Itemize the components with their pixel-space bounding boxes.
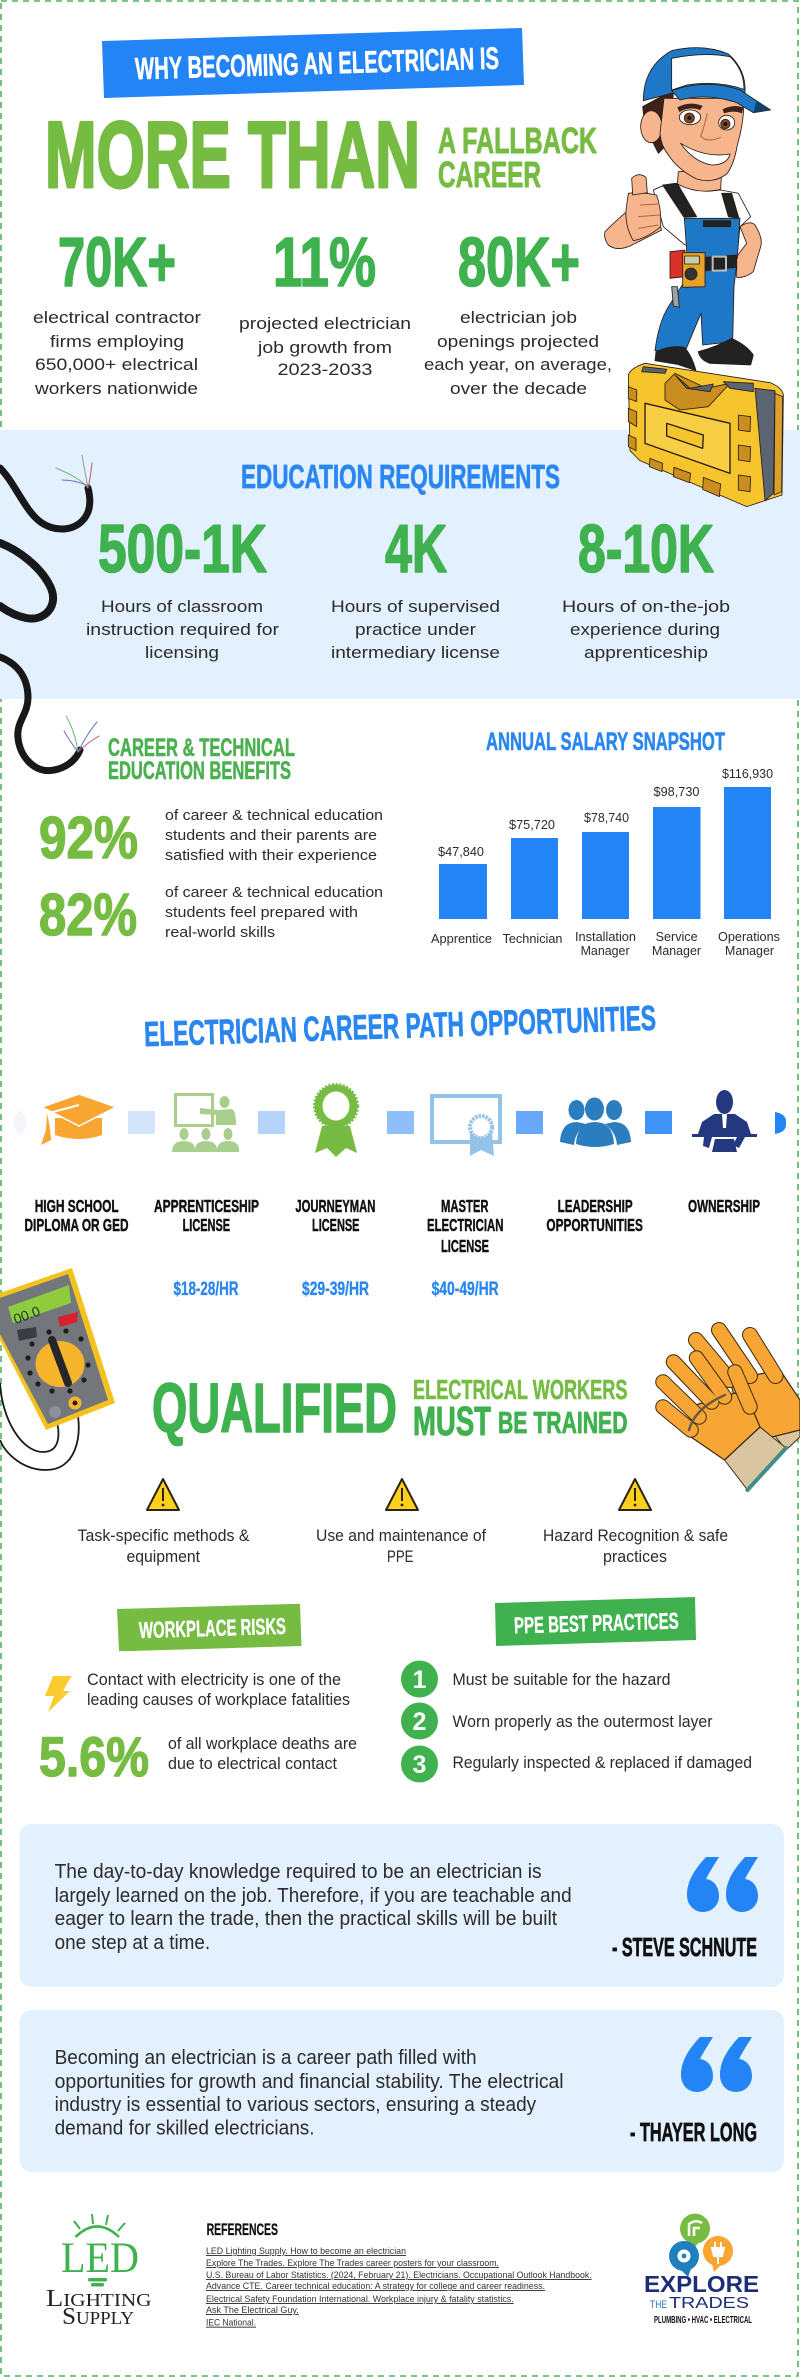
stat: 80K+ job openings: electrician job [460, 308, 577, 327]
illustration: electrician mascot standing on toolbox [605, 48, 783, 507]
risk text: contact with electricity [87, 1670, 350, 1709]
stat: 5.6% of workplace deaths: of all workplace deaths are [168, 1734, 357, 1753]
stat: 4K supervised practice hours: Hours of supervised [331, 597, 500, 616]
stat: 8-10K on-the-job hours [562, 511, 730, 662]
stat: 70K+ contractor firms: electrical contractor [33, 308, 201, 327]
stat: 11% job growth [239, 223, 411, 379]
title: a fallback career [438, 120, 597, 195]
training item: hazard recognition: Hazard Recognition & safe [543, 1526, 728, 1545]
stat: 92% satisfied: satisfied with their experience [165, 847, 377, 864]
stat: 80K+ job openings: 80K+ [458, 223, 580, 301]
references: U.S. Bureau of Labor Statistics. (2024, February 21). Electricians. Occupational Outlook Handbook. [206, 2270, 592, 2281]
path step: master electrician license: LICENSE [441, 1236, 489, 1256]
list item 2: worn properly: 2 [413, 1708, 426, 1736]
training item: task-specific methods: Task-specific methods & [78, 1526, 250, 1545]
heading: career and technical education benefits: EDUCATION BENEFITS [108, 757, 291, 785]
bar chart: annual salary: Manager [652, 943, 702, 958]
stat: 11% job growth: job growth from [257, 338, 392, 357]
list item 1: suitable for the hazard [401, 1660, 670, 1698]
list item 1: suitable for the hazard: Must be suitable for the hazard [452, 1670, 670, 1689]
training item: use and maintenance of PPE: PPE [387, 1547, 414, 1566]
tag: workplace risks [117, 1604, 302, 1651]
path step: journeyman license: $29-39/HR [302, 1279, 369, 1300]
path step: journeyman license [295, 1196, 375, 1300]
training item: task-specific methods: equipment [126, 1547, 200, 1566]
bar chart: annual salary: $47,840 [438, 844, 484, 859]
references: Explore The Trades. Explore The Trades career posters for your classroom. [206, 2258, 499, 2269]
path step: master electrician license: MASTER [441, 1196, 489, 1216]
logo: LED Lighting Supply: LED [61, 2235, 139, 2282]
panel: quote from Thayer Long [20, 2010, 784, 2172]
panel: education requirements background [0, 430, 800, 699]
panel: quote from Steve Schnute [20, 1824, 784, 1987]
stat: 82% prepared: 82% [39, 882, 137, 948]
logo: LED Lighting Supply: LIGHTING [46, 2286, 152, 2312]
logo: LED Lighting Supply: SUPPLY [62, 2304, 134, 2330]
stat: 500-1K classroom hours [86, 511, 279, 662]
stat: 8-10K on-the-job hours: 8-10K [578, 511, 714, 587]
stat: 5.6% of workplace deaths: due to electrical contact [168, 1754, 337, 1773]
logo: Explore The Trades: TRADES [669, 2295, 749, 2312]
path step: master electrician license [427, 1196, 504, 1300]
references: REFERENCES [207, 2221, 278, 2239]
stat: 92% satisfied: of career & technical education [165, 807, 383, 824]
stat: 500-1K classroom hours: instruction required for [86, 620, 279, 639]
stat: 5.6% of workplace deaths [39, 1725, 357, 1788]
icon: electrical cables [0, 455, 99, 771]
panel: quote from Thayer Long: Becoming an electrician is a career path filled with [55, 2047, 477, 2069]
title banner: why becoming an electrician is: WHY BECOMING AN ELECTRICIAN IS [135, 41, 499, 86]
panel: quote from Steve Schnute: one step at a time. [55, 1932, 210, 1954]
stat: 82% prepared: students feel prepared with [165, 904, 358, 921]
stat: 4K supervised practice hours: practice under [355, 620, 476, 639]
icon: apprenticeship classroom [172, 1094, 239, 1152]
path step: ownership: OWNERSHIP [688, 1196, 760, 1216]
bar chart: annual salary: $78,740 [584, 810, 629, 825]
heading: electrical workers must be trained: ELECTRICAL WORKERS [413, 1374, 628, 1405]
icon: owner at desk [692, 1090, 757, 1152]
path step: journeyman license: JOURNEYMAN [295, 1196, 375, 1216]
path step: high school diploma or GED: DIPLOMA OR GED [24, 1215, 128, 1235]
stat: 82% prepared [39, 882, 383, 948]
tag: workplace risks: WORKPLACE RISKS [139, 1613, 286, 1643]
references: LED Lighting Supply. How to become an electrician [206, 2246, 406, 2257]
path step: journeyman license: LICENSE [312, 1215, 360, 1235]
risk text: contact with electricity: Contact with electricity is one of the [87, 1670, 341, 1689]
stat: 500-1K classroom hours: licensing [145, 643, 219, 662]
logo: Explore The Trades [644, 2214, 759, 2326]
stat: 70K+ contractor firms: firms employing [50, 332, 184, 351]
icon: legs and boots [655, 260, 753, 371]
path step: leadership opportunities: OPPORTUNITIES [546, 1215, 643, 1235]
path step: apprenticeship license: $18-28/HR [174, 1279, 239, 1300]
path step: apprenticeship license: LICENSE [183, 1215, 230, 1235]
references: IEC National. [206, 2318, 256, 2329]
list item 3: regularly inspected: Regularly inspected & replaced if damaged [452, 1753, 752, 1772]
icon: leadership group [560, 1098, 631, 1147]
stat: 70K+ contractor firms [33, 223, 201, 398]
panel: quote from Steve Schnute: The day-to-day knowledge required to be an electrician is [55, 1861, 542, 1883]
stat: 11% job growth: projected electrician [239, 314, 411, 333]
tag: PPE best practices: PPE BEST PRACTICES [514, 1608, 679, 1638]
bar chart: annual salary: Installation [575, 929, 636, 944]
training item: hazard recognition: practices [603, 1547, 667, 1566]
training item: task-specific methods [78, 1479, 250, 1566]
list item 3: regularly inspected [401, 1746, 752, 1782]
references [206, 2221, 592, 2329]
stat: 80K+ job openings [424, 223, 612, 398]
list item 3: regularly inspected: 3 [413, 1751, 426, 1779]
list item 2: worn properly [401, 1702, 713, 1740]
stat: 92% satisfied: students and their parents are [165, 827, 377, 844]
icon: lightning bolt [45, 1676, 72, 1712]
stat: 80K+ job openings: over the decade [450, 379, 587, 398]
panel: quote from Steve Schnute: eager to learn the trade, then the practical skills will be built [55, 1908, 558, 1930]
stat: 11% job growth: 2023-2033 [278, 360, 372, 379]
stat: 500-1K classroom hours: Hours of classroom [101, 597, 263, 616]
panel: quote from Thayer Long: industry is essential to various sectors, ensuring a steady [55, 2094, 536, 2116]
title: more than: MORE THAN [45, 102, 420, 207]
path step: leadership opportunities: LEADERSHIP [558, 1196, 633, 1216]
icon: work gloves [663, 1330, 800, 1490]
list item 2: worn properly: Worn properly as the outermost layer [452, 1712, 713, 1731]
icon: tool belt [670, 250, 705, 307]
icon: torso and arms [605, 175, 761, 277]
title banner: why becoming an electrician is [102, 28, 524, 98]
icon: master certificate [432, 1096, 500, 1156]
references: Advance CTE. Career technical education: A strategy for college and career readiness. [206, 2281, 545, 2292]
panel: quote from Steve Schnute: largely learned on the job. Therefore, if you are teachable and [55, 1885, 572, 1907]
references: Electrical Safety Foundation International. Workplace injury & fatality statistics. [206, 2294, 514, 2305]
bar chart: annual salary: $75,720 [509, 817, 555, 832]
heading: electrical workers must be trained: MUST [413, 1398, 491, 1444]
heading: electrical workers must be trained [413, 1374, 628, 1444]
heading: career and technical education benefits: CAREER & TECHNICAL [108, 734, 295, 762]
heading: education requirements: EDUCATION REQUIREMENTS [241, 458, 560, 495]
stat: 4K supervised practice hours [331, 511, 500, 662]
stat: 5.6% of workplace deaths: 5.6% [39, 1725, 149, 1788]
tag: PPE best practices [495, 1597, 696, 1646]
path step: apprenticeship license: APPRENTICESHIP [154, 1196, 259, 1216]
title: a fallback career: A FALLBACK [438, 120, 597, 161]
stat: 8-10K on-the-job hours: apprenticeship [584, 643, 708, 662]
stat: 500-1K classroom hours: 500-1K [98, 511, 267, 587]
bar chart: annual salary: $116,930 [722, 766, 773, 781]
heading: electrical workers must be trained: BE TRAINED [498, 1405, 628, 1440]
icon: multimeter [0, 1268, 115, 1470]
bar chart: annual salary [431, 766, 780, 958]
bar chart: annual salary: Technician [502, 931, 562, 946]
logo: Explore The Trades: THE [650, 2299, 667, 2311]
stat: 8-10K on-the-job hours: Hours of on-the-job [562, 597, 730, 616]
icon: graduation cap [41, 1094, 116, 1145]
logo: LED Lighting Supply [46, 2214, 152, 2330]
heading: career and technical education benefits [108, 734, 295, 785]
path step: master electrician license: ELECTRICIAN [427, 1215, 504, 1235]
stat: 4K supervised practice hours: 4K [385, 511, 447, 587]
bar chart: annual salary: Apprentice [431, 931, 492, 946]
risk text: contact with electricity: leading causes of workplace fatalities [87, 1690, 350, 1709]
training item: use and maintenance of PPE [316, 1479, 486, 1566]
stat: 70K+ contractor firms: workers nationwide [34, 379, 198, 398]
stat: 70K+ contractor firms: 70K+ [58, 223, 176, 301]
list item 1: suitable for the hazard: 1 [413, 1666, 427, 1694]
bar chart: annual salary: $98,730 [654, 784, 700, 799]
panel: quote from Thayer Long: opportunities for growth and financial stability. The electrical [55, 2071, 564, 2093]
heading: qualified: QUALIFIED [152, 1369, 397, 1447]
training item: hazard recognition [543, 1479, 728, 1566]
timeline connectors [14, 1111, 786, 1134]
path step: high school diploma or GED [24, 1196, 128, 1235]
stat: 92% satisfied: 92% [39, 805, 138, 871]
icon: multimeter: 00.0 [11, 1303, 42, 1327]
stat: 8-10K on-the-job hours: experience during [570, 620, 720, 639]
path step: master electrician license: $40-49/HR [432, 1279, 499, 1300]
stat: 11% job growth: 11% [273, 223, 376, 301]
stat: 80K+ job openings: each year, on average, [424, 355, 612, 374]
stat: 82% prepared: of career & technical education [165, 884, 383, 901]
path step: apprenticeship license [154, 1196, 259, 1300]
bar chart: annual salary: Service [656, 929, 698, 944]
icon: journeyman ribbon [314, 1084, 358, 1157]
bar chart: annual salary: Manager [581, 943, 630, 958]
stat: 4K supervised practice hours: intermediary license [331, 643, 500, 662]
logo: Explore The Trades: EXPLORE [644, 2271, 759, 2297]
stat: 80K+ job openings: openings projected [437, 332, 599, 351]
bar chart: annual salary: Manager [725, 943, 775, 958]
stat: 92% satisfied [39, 805, 383, 871]
path step: leadership opportunities [546, 1196, 643, 1235]
references: Ask The Electrical Guy. [206, 2305, 299, 2316]
panel: quote from Thayer Long: demand for skilled electricians. [55, 2118, 315, 2140]
path step: high school diploma or GED: HIGH SCHOOL [35, 1196, 119, 1216]
bar chart: annual salary: Operations [718, 929, 780, 944]
training item: use and maintenance of PPE: Use and maintenance of [316, 1526, 486, 1545]
stat: 82% prepared: real-world skills [165, 924, 275, 941]
stat: 70K+ contractor firms: 650,000+ electrical [35, 355, 198, 374]
icon: toolbox [628, 363, 783, 507]
title: a fallback career: CAREER [438, 154, 541, 195]
icon: head and cap [641, 48, 771, 191]
